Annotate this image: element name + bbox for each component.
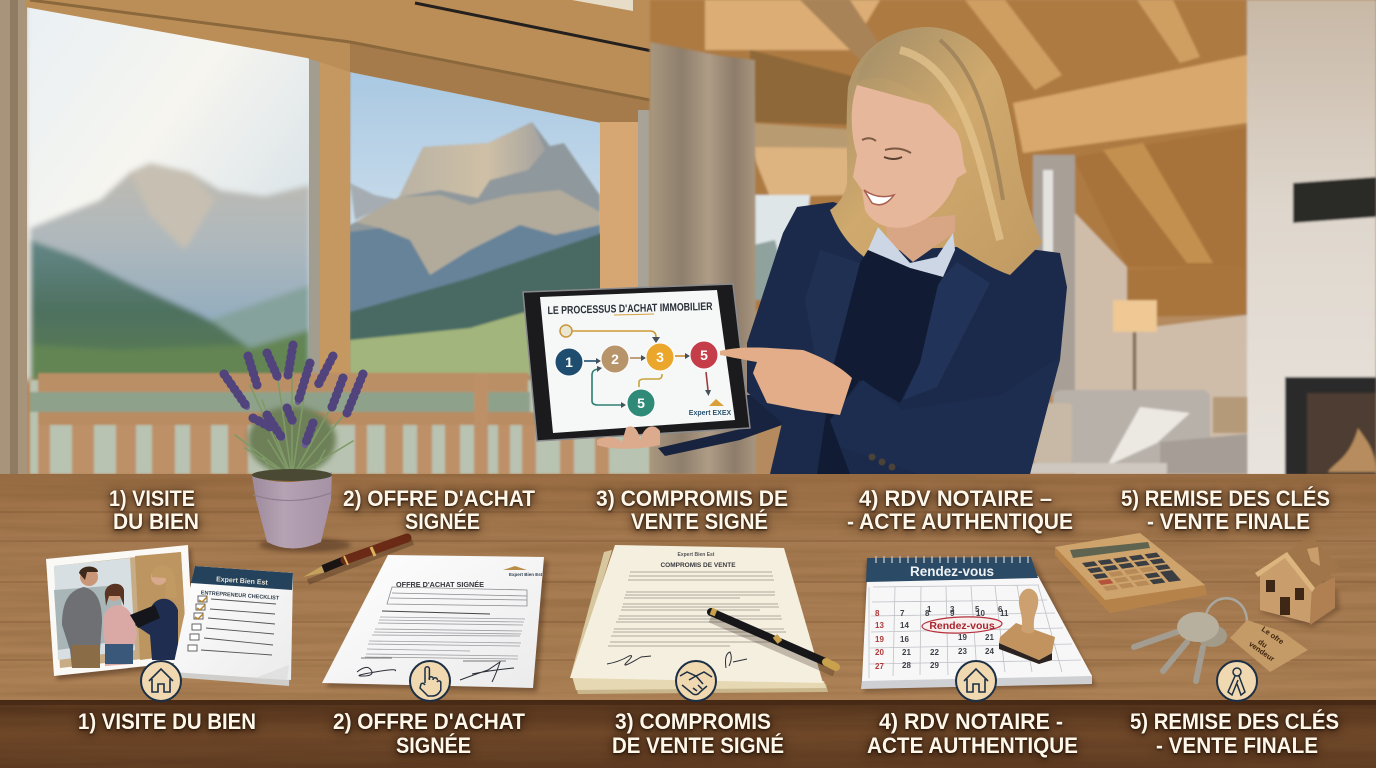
lower step labels: - VENTE FINALE: [1156, 733, 1318, 758]
calendar dates: 5: [975, 605, 980, 614]
calendar dates: 10: [976, 609, 985, 618]
pot shadow: [259, 538, 351, 552]
agreement logo and title: COMPROMIS DE VENTE: [660, 562, 736, 569]
offer title: OFFRE D'ACHAT SIGNÉE: [396, 580, 484, 589]
upper step labels: 1) VISITE: [109, 486, 195, 511]
upper step labels: - VENTE FINALE: [1147, 509, 1310, 534]
calendar dates: 29: [930, 661, 939, 670]
ceiling and back wall: [650, 0, 1376, 475]
calendar header: [866, 557, 1038, 582]
wooden key tag: [1230, 620, 1308, 672]
tablet logo: [689, 399, 732, 417]
offer table and body text lines: [365, 587, 527, 659]
agent: [135, 599, 178, 660]
tablet showing the process: [523, 284, 750, 441]
calendar dates: 11: [1000, 609, 1009, 618]
wooden key tag: vendeur: [1247, 639, 1276, 664]
lavender plant in pot: [224, 345, 363, 552]
icon: keys, step 5: [1217, 661, 1257, 701]
balcony railing: [30, 373, 650, 474]
pot: [252, 472, 332, 548]
couple man: [62, 587, 102, 668]
calendar dates: 27: [875, 662, 884, 671]
wooden table top: [0, 474, 1376, 768]
step one: checklist notepad: [171, 566, 293, 686]
upper step labels: 2) OFFRE D'ACHAT: [343, 486, 536, 511]
fountain pen: [710, 611, 836, 673]
step one: checklist notepad: Expert Bien Est: [216, 576, 269, 587]
background: chalet interior: [0, 0, 1376, 475]
tablet screen: [540, 290, 735, 433]
hair back: [830, 27, 1042, 275]
calendar dates: 13: [875, 621, 884, 630]
calendar dates: 19: [958, 633, 967, 642]
pointing hand: [720, 347, 852, 415]
step five red circle: [690, 341, 718, 369]
sleeve buttons: [868, 454, 896, 470]
checkbox rows: [188, 596, 276, 655]
calendar grid: [869, 585, 1081, 678]
icon: house, step 4: [956, 661, 996, 701]
agreement logo and title: [660, 552, 736, 569]
floor lamp: [1113, 300, 1157, 394]
couple woman: [103, 605, 137, 666]
tablet title: LE PROCESSUS D'ACHAT IMMOBILIER: [547, 301, 713, 317]
upper step labels: 3) COMPROMIS DE: [596, 486, 788, 511]
face details: [862, 138, 911, 205]
tablet logo: Expert EXEX: [689, 410, 732, 417]
woman presenting the tablet: [658, 27, 1067, 474]
shirt collar: [868, 227, 955, 277]
calendar title: Rendez-vous: [910, 564, 994, 579]
step one circle: 1: [565, 354, 573, 370]
calendar dates: [875, 605, 1009, 671]
upper step labels: [109, 486, 1330, 534]
sleeve behind the tablet: [658, 395, 785, 456]
step five: keys with wooden tag: [1134, 598, 1308, 681]
step five: wooden house: [1255, 535, 1340, 628]
calendar dates: 22: [930, 648, 939, 657]
calendar dates: 8: [875, 609, 880, 618]
centre window with mountain view: [350, 70, 602, 375]
wooden key tag: du: [1256, 637, 1269, 650]
navy sweater: [833, 250, 943, 403]
step three circle: [646, 343, 674, 371]
upper step labels: 5) REMISE DES CLÉS: [1121, 486, 1330, 511]
icon: pointing hand, step 2: [410, 661, 450, 701]
process flow arrows: [572, 331, 708, 405]
step five green circle: 5: [637, 395, 645, 411]
face: [852, 85, 967, 228]
rendez-vous stamp mark: Rendez-vous: [929, 620, 995, 632]
hand holding the tablet: [597, 426, 660, 449]
sofa: [1027, 390, 1247, 474]
money icon on tablet: [560, 325, 572, 337]
hair front sweep: [857, 27, 1042, 270]
step three circle: 3: [656, 349, 664, 365]
step four: appointment calendar: [861, 556, 1096, 692]
calendar dates: 9: [950, 609, 955, 618]
upper step labels: SIGNÉE: [405, 509, 480, 534]
agreement logo and title: Expert Bien Est: [678, 552, 715, 558]
calendar dates: 14: [900, 621, 909, 630]
calendar dates: 21: [902, 648, 911, 657]
photo image: [54, 552, 187, 668]
step five red circle: 5: [700, 347, 708, 363]
left window with mountain view: [25, 0, 315, 380]
offer logo: [503, 566, 543, 577]
step two: purchase offer document: [322, 555, 548, 692]
icon: house, step 1: [141, 661, 181, 701]
upper step labels: 4) RDV NOTAIRE –: [859, 486, 1052, 511]
offer signatures: [357, 658, 514, 682]
lower step labels: 2) OFFRE D'ACHAT: [333, 709, 526, 734]
icon: handshake, step 3: [676, 661, 716, 701]
calendar dates: 19: [875, 635, 884, 644]
calendar dates: 6: [998, 605, 1003, 614]
neck: [885, 215, 955, 262]
calendar dates: 3: [950, 605, 955, 614]
lapel right: [903, 262, 990, 400]
forearm sleeve: [830, 357, 1060, 474]
keys: [1134, 632, 1203, 681]
calendar dates: 8: [925, 609, 930, 618]
calendar dates: 20: [875, 648, 884, 657]
step two circle: [601, 345, 629, 373]
step one: visit photo: [46, 545, 197, 680]
calendar dates: 23: [958, 647, 967, 656]
upper step labels: VENTE SIGNÉ: [631, 509, 768, 534]
step one: checklist notepad: ENTREPRENEUR CHECKLIST: [201, 590, 280, 602]
calendar dates: 24: [985, 647, 994, 656]
calendar dates: 1: [927, 605, 932, 614]
step two circle: 2: [611, 351, 619, 367]
wooden key tag: Le ofre: [1260, 625, 1286, 646]
curtain: [650, 42, 756, 474]
step five green circle: [627, 389, 655, 417]
calendar dates: 28: [902, 661, 911, 670]
step three: sales agreement document: [570, 545, 836, 694]
calendar spiral: [876, 556, 1028, 563]
lower step labels: SIGNÉE: [396, 733, 471, 758]
lower step labels: 5) REMISE DES CLÉS: [1130, 709, 1339, 734]
lavender foliage: [235, 350, 353, 478]
lower step labels: 4) RDV NOTAIRE -: [879, 709, 1063, 734]
lower step labels: [78, 709, 1339, 758]
calculator keys: [1082, 552, 1181, 591]
upper step labels: - ACTE AUTHENTIQUE: [847, 509, 1073, 534]
rendez-vous stamp mark: [922, 616, 1002, 634]
agreement signatures: [607, 652, 747, 668]
notepad header: [191, 566, 293, 590]
upper step labels: DU BIEN: [113, 509, 199, 534]
wooden stamp: [999, 589, 1055, 664]
pen near the offer: [303, 538, 413, 582]
blazer body: [747, 202, 1067, 474]
calculator display: [1070, 542, 1150, 558]
window frames: [0, 0, 662, 474]
calendar dates: 16: [900, 635, 909, 644]
lavender flowers: [224, 345, 363, 445]
calendar dates: 7: [900, 609, 905, 618]
offer logo: Expert Bien Est: [509, 572, 543, 577]
agreement body text lines: [608, 572, 786, 646]
lower step labels: DE VENTE SIGNÉ: [612, 733, 784, 758]
table front edge: [0, 700, 1376, 768]
lower step labels: 3) COMPROMIS: [615, 709, 771, 734]
lapel left: [805, 250, 860, 373]
step five: calculator: [1055, 533, 1207, 613]
arrowheads: [596, 337, 711, 408]
lower step labels: ACTE AUTHENTIQUE: [867, 733, 1078, 758]
calendar dates: 21: [985, 633, 994, 642]
lower step labels: 1) VISITE DU BIEN: [78, 709, 256, 734]
step one circle: [555, 348, 583, 376]
